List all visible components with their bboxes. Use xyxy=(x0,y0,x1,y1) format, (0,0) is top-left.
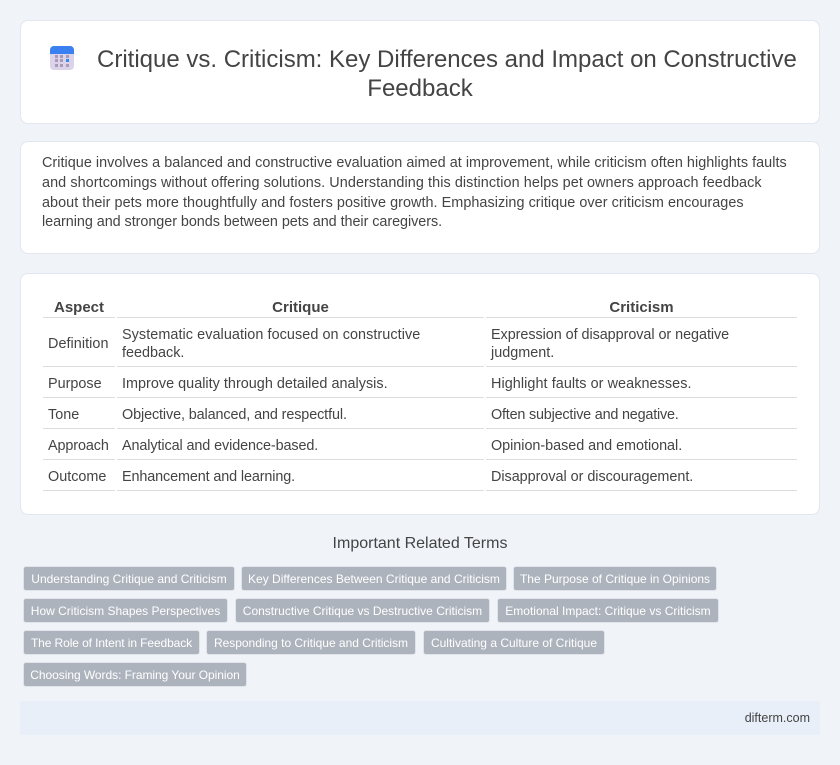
icon: calendar xyxy=(50,46,74,70)
tag: The Role of Intent in Feedback xyxy=(31,636,192,650)
comparison table: Highlight faults or weaknesses. xyxy=(491,376,692,392)
comparison table xyxy=(43,299,797,491)
related terms tags xyxy=(23,566,719,687)
tag: The Purpose of Critique in Opinions xyxy=(520,572,710,586)
footer bar xyxy=(20,701,820,735)
comparison table: Enhancement and learning. xyxy=(122,469,295,485)
comparison table: Improve quality through detailed analysis. xyxy=(122,376,388,392)
comparison table: Objective, balanced, and respectful. xyxy=(122,407,347,423)
tag xyxy=(513,566,717,591)
tag: How Criticism Shapes Perspectives xyxy=(31,604,220,618)
intro panel xyxy=(20,141,820,254)
title xyxy=(97,46,797,102)
row: tone: Tone xyxy=(48,407,79,423)
table panel xyxy=(20,273,820,515)
row: purpose: Purpose xyxy=(48,376,102,392)
intro text: and shortcomings without offering solutions. Understanding this distinction helps pet owners approach feedback xyxy=(42,175,762,191)
comparison table: judgment. xyxy=(491,345,554,361)
tag xyxy=(23,630,200,655)
tag: Emotional Impact: Critique vs Criticism xyxy=(505,604,711,618)
tag xyxy=(423,630,605,655)
header row: Aspect xyxy=(54,299,104,316)
comparison table: Often subjective and negative. xyxy=(491,407,679,423)
comparison table: Disapproval or discouragement. xyxy=(491,469,693,485)
intro text: about their pets more thoughtfully and fosters positive growth. Emphasizing critique over criticism encourages xyxy=(42,195,744,211)
header panel xyxy=(20,20,820,124)
intro text xyxy=(42,155,787,230)
row: outcome: Outcome xyxy=(48,469,106,485)
related terms heading: Important Related Terms xyxy=(333,535,507,552)
comparison table: Opinion-based and emotional. xyxy=(491,438,682,454)
tag: Key Differences Between Critique and Criticism xyxy=(248,572,500,586)
comparison table: Analytical and evidence-based. xyxy=(122,438,318,454)
row: definition: Definition xyxy=(48,336,108,352)
tag: Responding to Critique and Criticism xyxy=(214,636,408,650)
comparison table: Critique xyxy=(272,299,329,316)
intro text: learning and stronger bonds between pets and their caregivers. xyxy=(42,214,442,230)
tag: Understanding Critique and Criticism xyxy=(31,572,227,586)
tag xyxy=(23,662,247,687)
tag xyxy=(206,630,416,655)
title: Feedback xyxy=(367,75,473,102)
comparison table: Expression of disapproval or negative xyxy=(491,327,729,343)
title: Critique vs. Criticism: Key Differences and Impact on Constructive xyxy=(97,46,797,73)
tag xyxy=(497,598,719,623)
tag xyxy=(23,566,235,591)
comparison table: feedback. xyxy=(122,345,184,361)
tag xyxy=(235,598,490,623)
tag: Constructive Critique vs Destructive Criticism xyxy=(243,604,482,618)
tag xyxy=(23,598,228,623)
row: approach: Approach xyxy=(48,438,109,454)
tag xyxy=(241,566,507,591)
intro text: Critique involves a balanced and constructive evaluation aimed at improvement, while criticism often highlights faults xyxy=(42,155,787,171)
tag: Choosing Words: Framing Your Opinion xyxy=(30,668,240,682)
tag: Cultivating a Culture of Critique xyxy=(431,636,597,650)
comparison table: Criticism xyxy=(609,299,674,316)
comparison table: Systematic evaluation focused on constructive xyxy=(122,327,420,343)
footer text: difterm.com xyxy=(745,711,810,725)
